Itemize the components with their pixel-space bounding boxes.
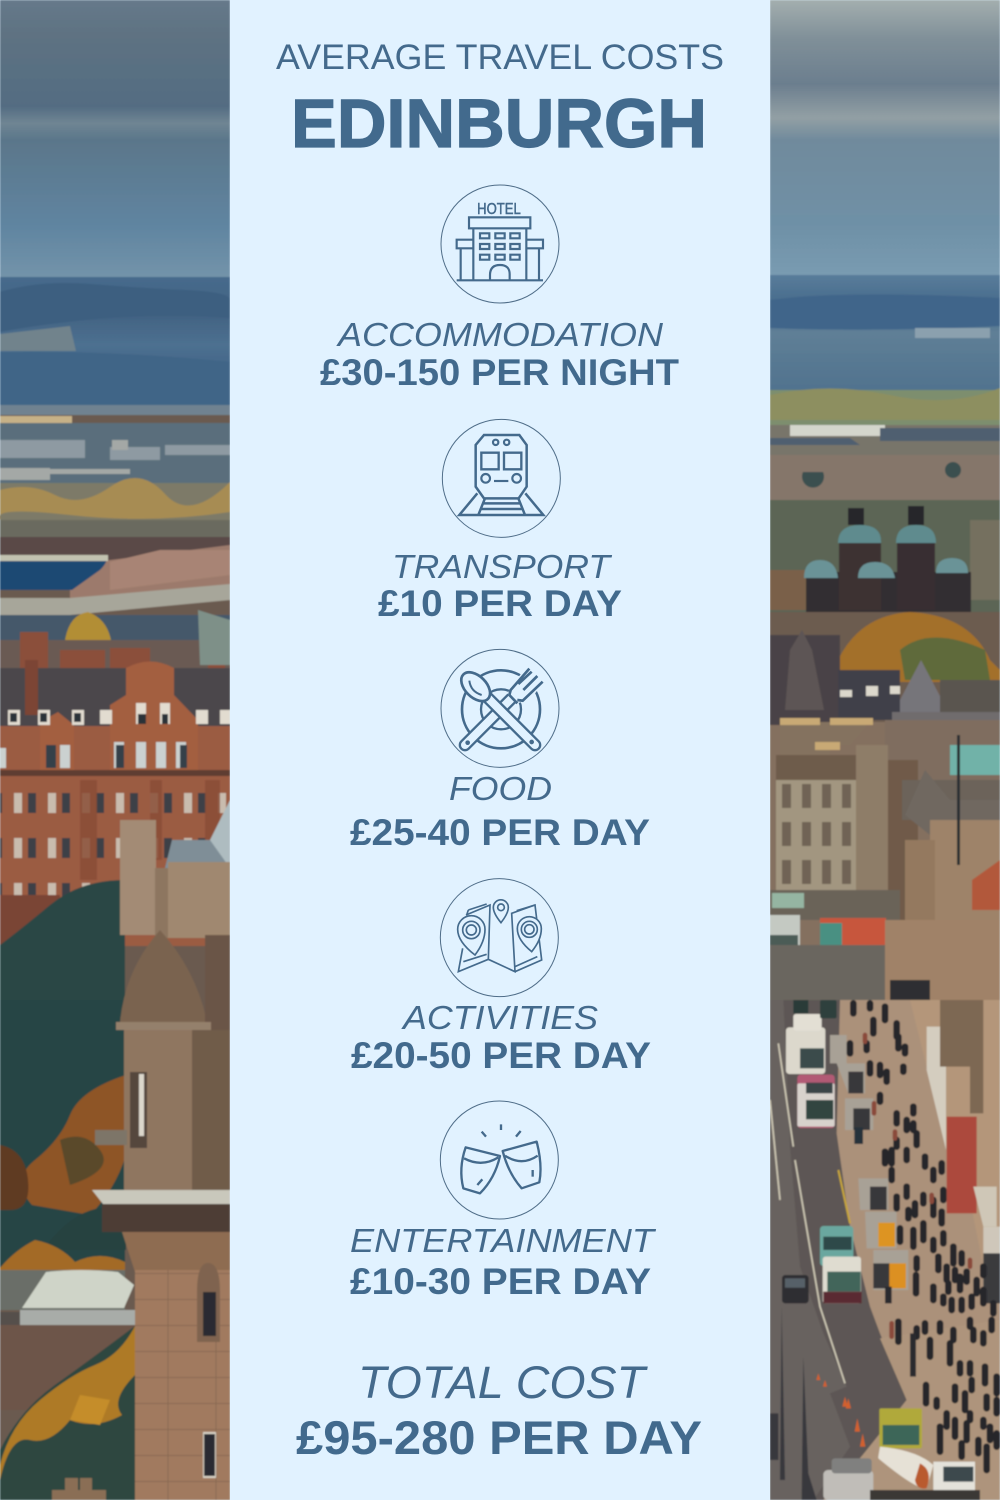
icon: map: [440, 879, 558, 997]
title: Edinburgh: EDINBURGH: [291, 85, 707, 162]
icon: hotel: HOTEL: [477, 201, 521, 218]
cost: food: £25-40 PER DAY: [350, 812, 650, 853]
icon: drinks: [440, 1101, 558, 1219]
photo: right city strip: [770, 0, 1000, 1500]
label: food: FOOD: [449, 770, 552, 807]
label: total cost: TOTAL COST: [358, 1357, 649, 1408]
photo: left city strip: [0, 0, 230, 1500]
cost: accommodation: £30-150 PER NIGHT: [320, 352, 679, 393]
cost: entertainment: £10-30 PER DAY: [350, 1261, 651, 1302]
icon: train: [442, 419, 560, 537]
icon: hotel: [441, 185, 559, 303]
label: entertainment: ENTERTAINMENT: [350, 1222, 657, 1259]
label: transport: TRANSPORT: [392, 548, 613, 585]
title: average travel costs: AVERAGE TRAVEL COSTS: [276, 38, 724, 77]
cost: activities: £20-50 PER DAY: [351, 1035, 651, 1076]
cost: transport: £10 PER DAY: [378, 583, 622, 624]
icon: food: [441, 649, 559, 767]
panel: costs column: [230, 0, 770, 1500]
label: activities: ACTIVITIES: [401, 999, 598, 1036]
cost: total: £95-280 PER DAY: [296, 1411, 702, 1464]
label: accommodation: ACCOMMODATION: [336, 316, 663, 353]
